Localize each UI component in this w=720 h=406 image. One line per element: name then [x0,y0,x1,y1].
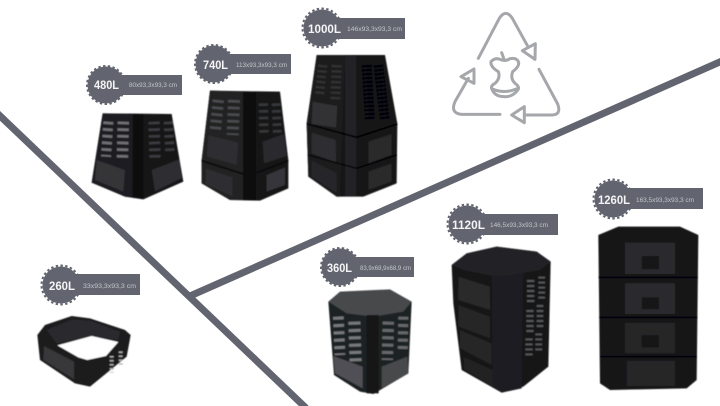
label: 360L [321,248,414,286]
inner back walls [47,319,120,343]
label: 260L: 33x93,3x93,3 cm [83,284,136,290]
label: 1260L: 163,5x93,3x93,3 cm [636,198,694,204]
door panels [312,102,337,127]
door panels [95,160,125,192]
bin body [452,247,551,393]
icon: recycling triangle with apple core [453,13,559,123]
door panels [458,277,490,310]
product: 480L composter [92,113,183,199]
ring body [37,316,131,387]
label: 260L: 260L [49,279,75,293]
product: 1120L composter [452,247,551,393]
door panels [207,135,238,165]
product: 1000L composter [307,55,397,197]
divider line: right diagonal [190,61,720,296]
lid [328,289,412,317]
label: 1260L [594,180,703,218]
vents [319,65,385,120]
stacked front panels [625,243,675,274]
vents [106,122,170,160]
lower vents [267,167,285,192]
label: 1120L [448,204,558,244]
label: 1120L: 1120L [452,218,485,232]
product: 360L composter [328,289,412,394]
label: 1000L: 146x93,3x93,3 cm [347,27,402,33]
bin body [598,227,698,390]
bin body [202,91,288,201]
label: 480L: 480L [94,78,119,92]
label: 1000L: 1000L [308,22,341,36]
label: 1000L [302,8,405,48]
label: 480L: 80x93,3x93,3 cm [129,83,177,89]
product: 1260L composter [598,227,698,390]
product: 260L composter ring [37,316,131,387]
label: 740L: 740L [203,58,228,72]
label: 260L [42,266,140,304]
lid [452,247,551,277]
label: 360L: 83,9x68,9x68,9 cm [360,266,411,272]
bin body [307,55,397,197]
label: 740L [195,45,291,83]
inner open floor [57,336,118,360]
side corner [492,273,523,393]
label: 1260L: 1260L [598,193,630,207]
door panels [333,356,363,388]
divider line: left diagonal [0,113,306,406]
vents [529,277,542,358]
panel center marks [642,256,659,269]
label: 480L [87,66,182,104]
product: 740L composter [202,91,288,201]
vent holes [106,356,118,373]
vents [215,100,277,135]
label: 1120L: 146,5x93,3x93,3 cm [490,223,548,229]
door panel [43,346,74,379]
bin body [328,302,412,394]
vents [338,317,403,362]
bin body [92,113,183,199]
label: 740L: 113x93,3x93,3 cm [236,63,287,69]
ledges [599,275,698,280]
label: 360L: 360L [327,261,352,275]
